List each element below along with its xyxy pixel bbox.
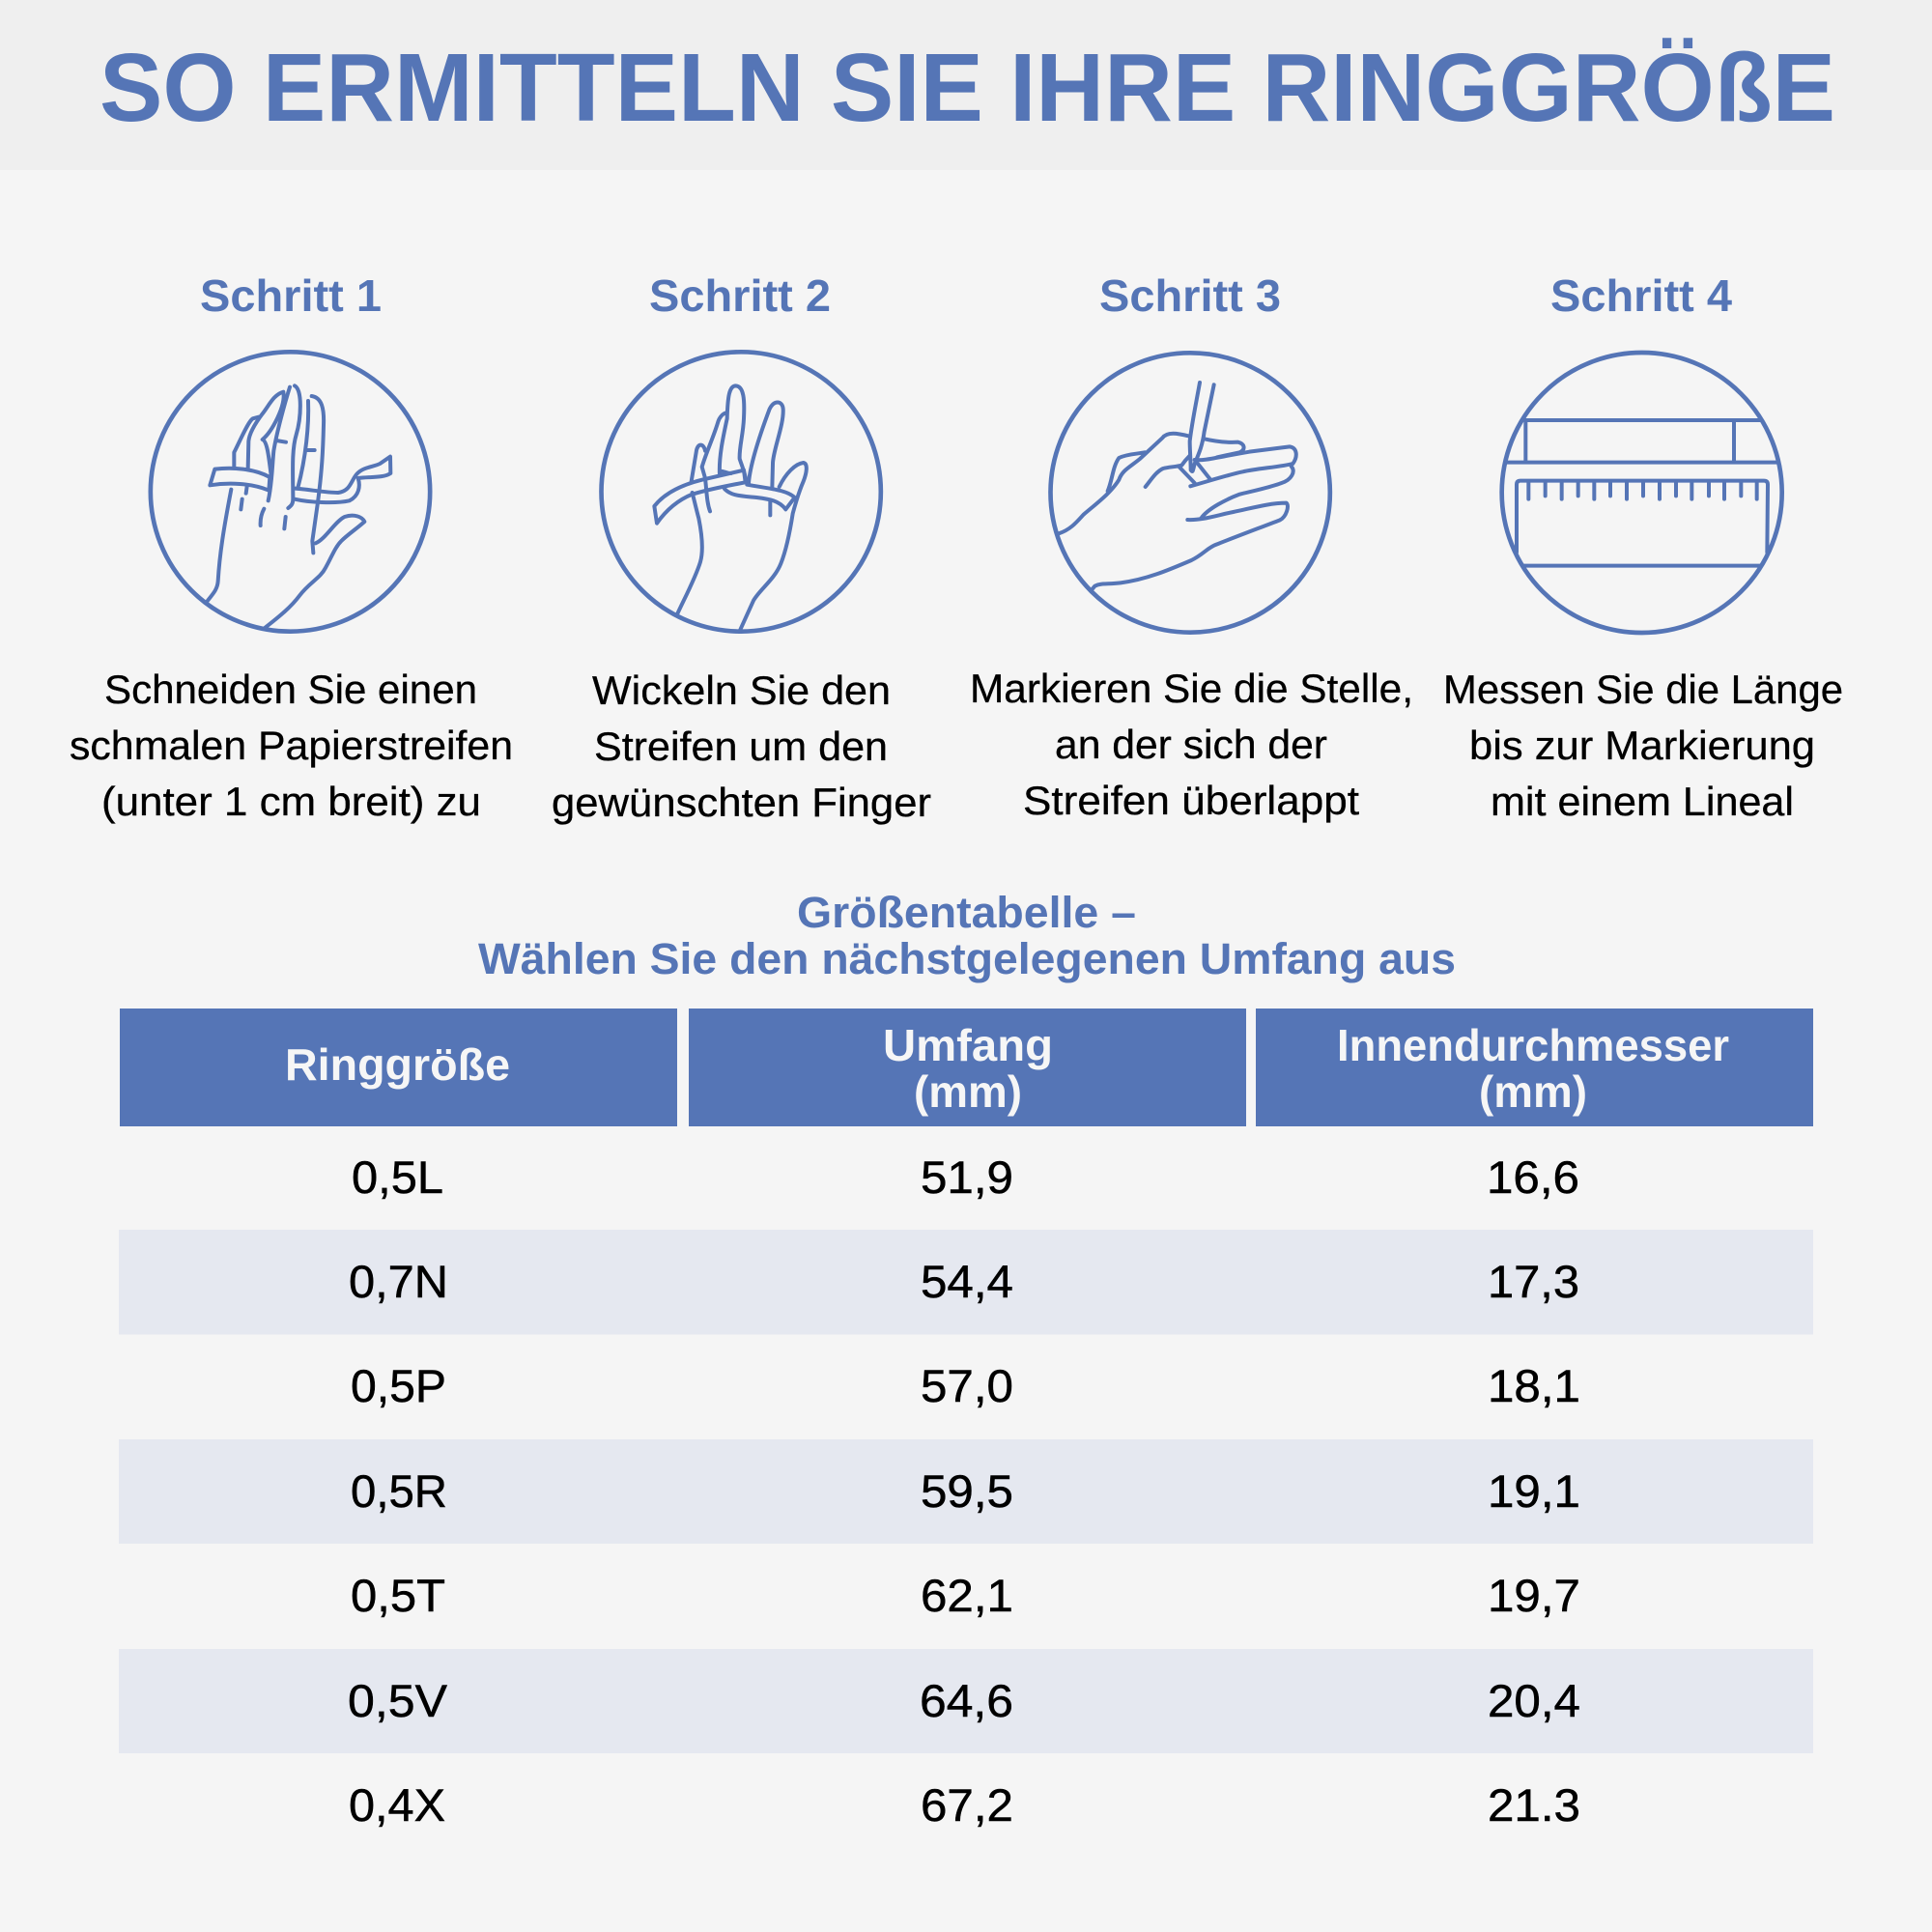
table header row: (mm) [914, 1066, 1022, 1117]
instruction text step 1: schmalen Papierstreifen [70, 723, 513, 768]
row 0,5L: 16,6 [1487, 1151, 1579, 1203]
table header row: (mm) [1479, 1066, 1587, 1117]
row 0,5P: 18,1 [1488, 1360, 1580, 1411]
instruction text step 2 [552, 668, 931, 825]
row 0,4X: 67,2 [921, 1779, 1013, 1831]
table heading: Wählen Sie den nächstgelegenen Umfang aus [478, 934, 1456, 983]
instruction text step 4: Messen Sie die Länge [1443, 667, 1843, 712]
instruction text step 1: Schneiden Sie einen [104, 667, 477, 712]
row 0,5R [119, 1439, 1813, 1544]
panel: step 3 [970, 270, 1413, 823]
icon: marking strip with pen [1050, 353, 1330, 633]
row 0,7N: 17,3 [1488, 1256, 1579, 1307]
icon: strip wrapped around finger [601, 352, 881, 632]
row 0,7N: 0,7N [349, 1256, 448, 1307]
table header row: Ringgröße [285, 1039, 510, 1090]
row 0,5T: 0,5T [351, 1570, 445, 1621]
instruction text step 4: mit einem Lineal [1491, 779, 1794, 824]
instruction text step 3: an der sich der [1055, 722, 1327, 767]
row 0,5L: 0,5L [352, 1151, 443, 1203]
row 0,5T [351, 1570, 1580, 1621]
heading: Schritt 3: Schritt 3 [1099, 270, 1281, 321]
instruction text step 2: gewünschten Finger [552, 780, 931, 825]
row 0,7N: 54,4 [921, 1256, 1013, 1307]
instruction text step 3 [970, 666, 1413, 823]
icon: strip and ruler [1502, 353, 1782, 633]
instruction text step 4 [1443, 667, 1843, 824]
row 0,5P: 57,0 [921, 1360, 1013, 1411]
row 0,5P: 0,5P [351, 1360, 446, 1411]
row 0,4X [349, 1779, 1580, 1831]
row 0,5T: 19,7 [1488, 1570, 1580, 1621]
row 0,5V: 0,5V [348, 1675, 448, 1726]
instruction text step 1: (unter 1 cm breit) zu [101, 779, 481, 824]
instruction text step 3: Streifen überlappt [1023, 778, 1359, 823]
table header row: Umfang [883, 1020, 1053, 1070]
row 0,7N [119, 1230, 1813, 1335]
table heading [478, 888, 1456, 983]
instruction text step 2: Wickeln Sie den [592, 668, 891, 713]
row 0,5R: 0,5R [351, 1465, 447, 1517]
row 0,4X: 0,4X [349, 1779, 445, 1831]
table heading: Größentabelle – [797, 888, 1136, 937]
heading: Schritt 4: Schritt 4 [1550, 270, 1732, 321]
row 0,5P [351, 1360, 1580, 1411]
row 0,5V [119, 1649, 1813, 1753]
title: SO ERMITTELN SIE IHRE RINGGRÖßE [99, 34, 1835, 142]
row 0,4X: 21.3 [1488, 1779, 1580, 1831]
size table [119, 1009, 1813, 1831]
row 0,5L [352, 1151, 1579, 1203]
panel: step 4 [1443, 270, 1843, 824]
table header row: Innendurchmesser [1337, 1020, 1729, 1070]
instruction text step 3: Markieren Sie die Stelle, [970, 666, 1413, 711]
row 0,5V: 64,6 [920, 1675, 1013, 1726]
panel: step 2 [552, 270, 931, 825]
heading: Schritt 2: Schritt 2 [649, 270, 831, 321]
row 0,5L: 51,9 [921, 1151, 1013, 1203]
panel: step 1 [70, 270, 513, 824]
icon: hand with paper strip [151, 352, 430, 632]
row 0,5R: 59,5 [921, 1465, 1013, 1517]
row 0,5T: 62,1 [921, 1570, 1013, 1621]
instruction text step 4: bis zur Markierung [1469, 723, 1815, 768]
row 0,5R: 19,1 [1488, 1465, 1580, 1517]
instruction text step 1 [70, 667, 513, 824]
title banner [0, 0, 1932, 170]
row 0,5V: 20,4 [1488, 1675, 1580, 1726]
table header row [120, 1009, 1813, 1126]
instruction text step 2: Streifen um den [594, 724, 888, 769]
heading: Schritt 1: Schritt 1 [200, 270, 382, 321]
